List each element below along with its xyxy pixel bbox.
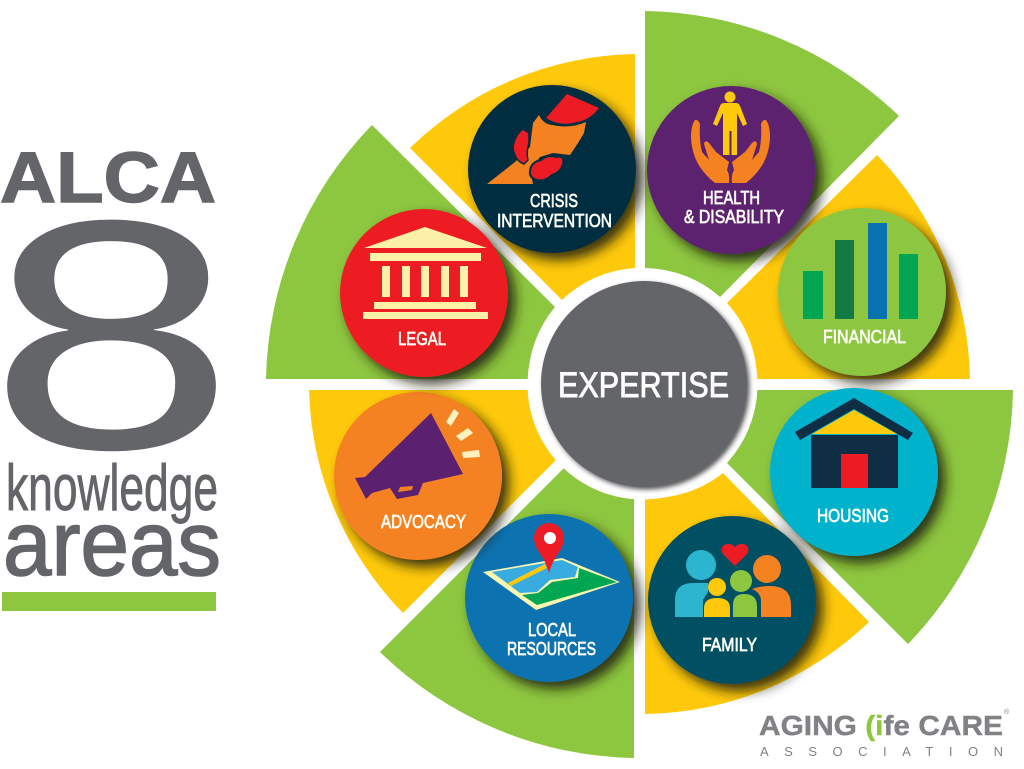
label: health: HEALTH <box>703 187 760 208</box>
segment: financial yellow <box>727 155 970 379</box>
label: expertise: EXPERTISE <box>558 366 729 405</box>
green title underline <box>2 592 216 611</box>
panel: crisis intervention <box>468 85 636 253</box>
label: intervention: INTERVENTION <box>497 210 612 231</box>
label: family: FAMILY <box>702 634 757 655</box>
title: areas: areas <box>3 493 221 595</box>
wheel segments <box>266 11 1013 758</box>
title block <box>0 139 235 595</box>
icon: person in hands <box>691 92 770 183</box>
logo: aging life care association <box>759 708 1010 759</box>
label: crisis: CRISIS <box>530 190 578 211</box>
icon: house <box>795 398 913 488</box>
label: and disability: & DISABILITY <box>684 206 784 227</box>
panel: advocacy <box>334 392 502 560</box>
logo: registered mark: ® <box>1004 708 1010 716</box>
panel: legal <box>340 209 508 377</box>
icon: bar chart <box>803 223 918 319</box>
icon: family with heart <box>675 544 791 617</box>
icon: megaphone <box>355 409 480 499</box>
segment: legal green <box>266 125 555 379</box>
segment: crisis yellow <box>410 54 635 300</box>
label: resources: RESOURCES <box>507 638 596 659</box>
label: advocacy: ADVOCACY <box>381 511 466 532</box>
icon: map with pin <box>483 523 620 610</box>
label: financial: FINANCIAL <box>823 326 906 347</box>
center hub: expertise <box>528 270 758 500</box>
segment: health green <box>645 11 899 297</box>
label: local: LOCAL <box>528 619 576 640</box>
title: ALCA: ALCA <box>0 139 216 218</box>
label: legal: LEGAL <box>398 328 446 349</box>
segment: advocacy yellow <box>309 390 557 613</box>
panel: local resources <box>465 514 633 682</box>
panel: housing <box>770 388 938 556</box>
segment: local resources green <box>380 468 634 758</box>
panel: health and disability <box>647 86 815 254</box>
icon: courthouse <box>363 227 488 319</box>
panel: family <box>648 516 816 684</box>
segment: housing green <box>727 390 1013 644</box>
panel: financial <box>778 208 946 376</box>
segment: family yellow <box>645 473 869 714</box>
label: housing: HOUSING <box>817 505 889 526</box>
icon: clasped hands <box>487 94 599 184</box>
logo: association: ASSOCIATION <box>760 744 1003 759</box>
title: knowledge: knowledge <box>6 451 218 524</box>
logo: aging life care association: AGING (ife CARE <box>759 710 1003 741</box>
